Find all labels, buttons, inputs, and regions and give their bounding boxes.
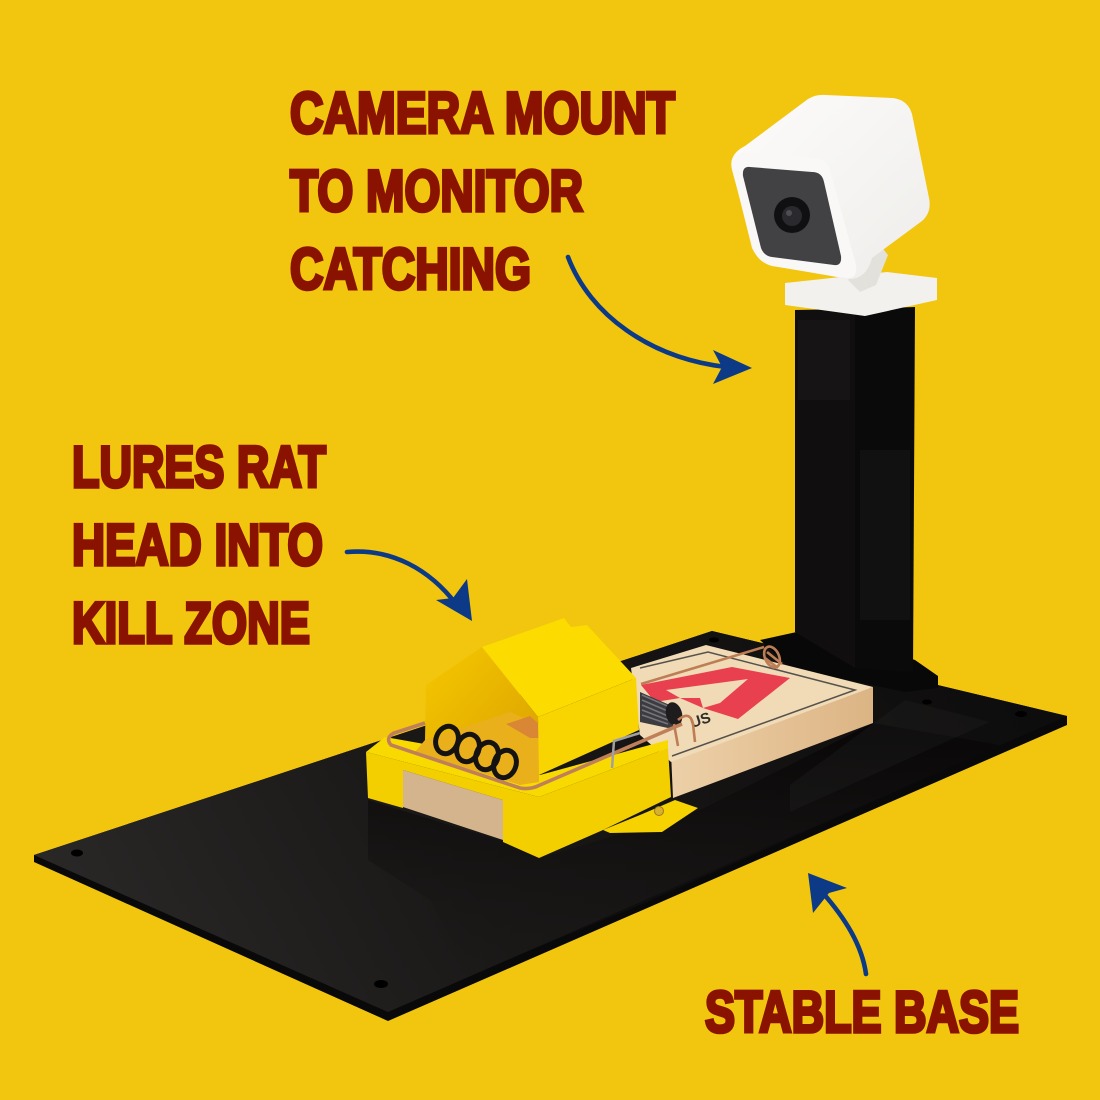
hood side bbox=[538, 678, 639, 775]
heading: stable base: STABLE BASE bbox=[705, 980, 1019, 1045]
copper wire bar bbox=[389, 723, 682, 789]
camera lens bbox=[774, 197, 810, 233]
screw holes bbox=[71, 638, 1027, 988]
heading: camera mount: CATCHING bbox=[290, 237, 531, 302]
heading: camera mount: CAMERA MOUNT bbox=[290, 81, 675, 146]
hood inner wall bbox=[425, 647, 539, 775]
spring bbox=[640, 692, 685, 728]
black base plate bbox=[34, 631, 1067, 1021]
arrow: to base bbox=[808, 873, 866, 974]
floor inside guard bbox=[415, 712, 539, 785]
camera bracket bbox=[785, 272, 937, 316]
mouse trap bbox=[366, 618, 873, 858]
steel catch bbox=[612, 733, 640, 768]
printed letters: US bbox=[688, 709, 713, 732]
yellow guard front bbox=[366, 748, 671, 858]
hood roof bbox=[482, 618, 636, 717]
wood end under guard bbox=[403, 770, 503, 840]
rear wire and loop bbox=[641, 644, 783, 746]
heading: lures rat bbox=[72, 435, 326, 656]
arrow: to kill zone bbox=[347, 552, 472, 621]
orange bait pedal bbox=[506, 716, 540, 738]
heading: camera mount bbox=[290, 81, 675, 302]
yellow guard top surface bbox=[366, 737, 668, 797]
camera screen bbox=[743, 167, 841, 265]
heading: camera mount: TO MONITOR bbox=[290, 159, 583, 224]
camera body bbox=[732, 95, 930, 279]
heading: lures rat: LURES RAT bbox=[72, 435, 326, 500]
printed border bbox=[640, 652, 855, 756]
black camera post bbox=[760, 307, 938, 692]
camera front face bbox=[731, 153, 856, 278]
arrow: to camera mount bbox=[568, 257, 752, 384]
camera bbox=[731, 95, 937, 316]
red logo bbox=[641, 667, 790, 719]
heading: lures rat: KILL ZONE bbox=[72, 591, 310, 656]
wood block top bbox=[631, 645, 873, 762]
black coils bbox=[432, 723, 520, 781]
yellow house hood bbox=[415, 618, 639, 785]
reflection of trap bbox=[368, 723, 1000, 975]
wood block side bbox=[671, 687, 873, 798]
yellow mounting tab bbox=[603, 800, 698, 833]
heading: lures rat: HEAD INTO bbox=[72, 513, 323, 578]
